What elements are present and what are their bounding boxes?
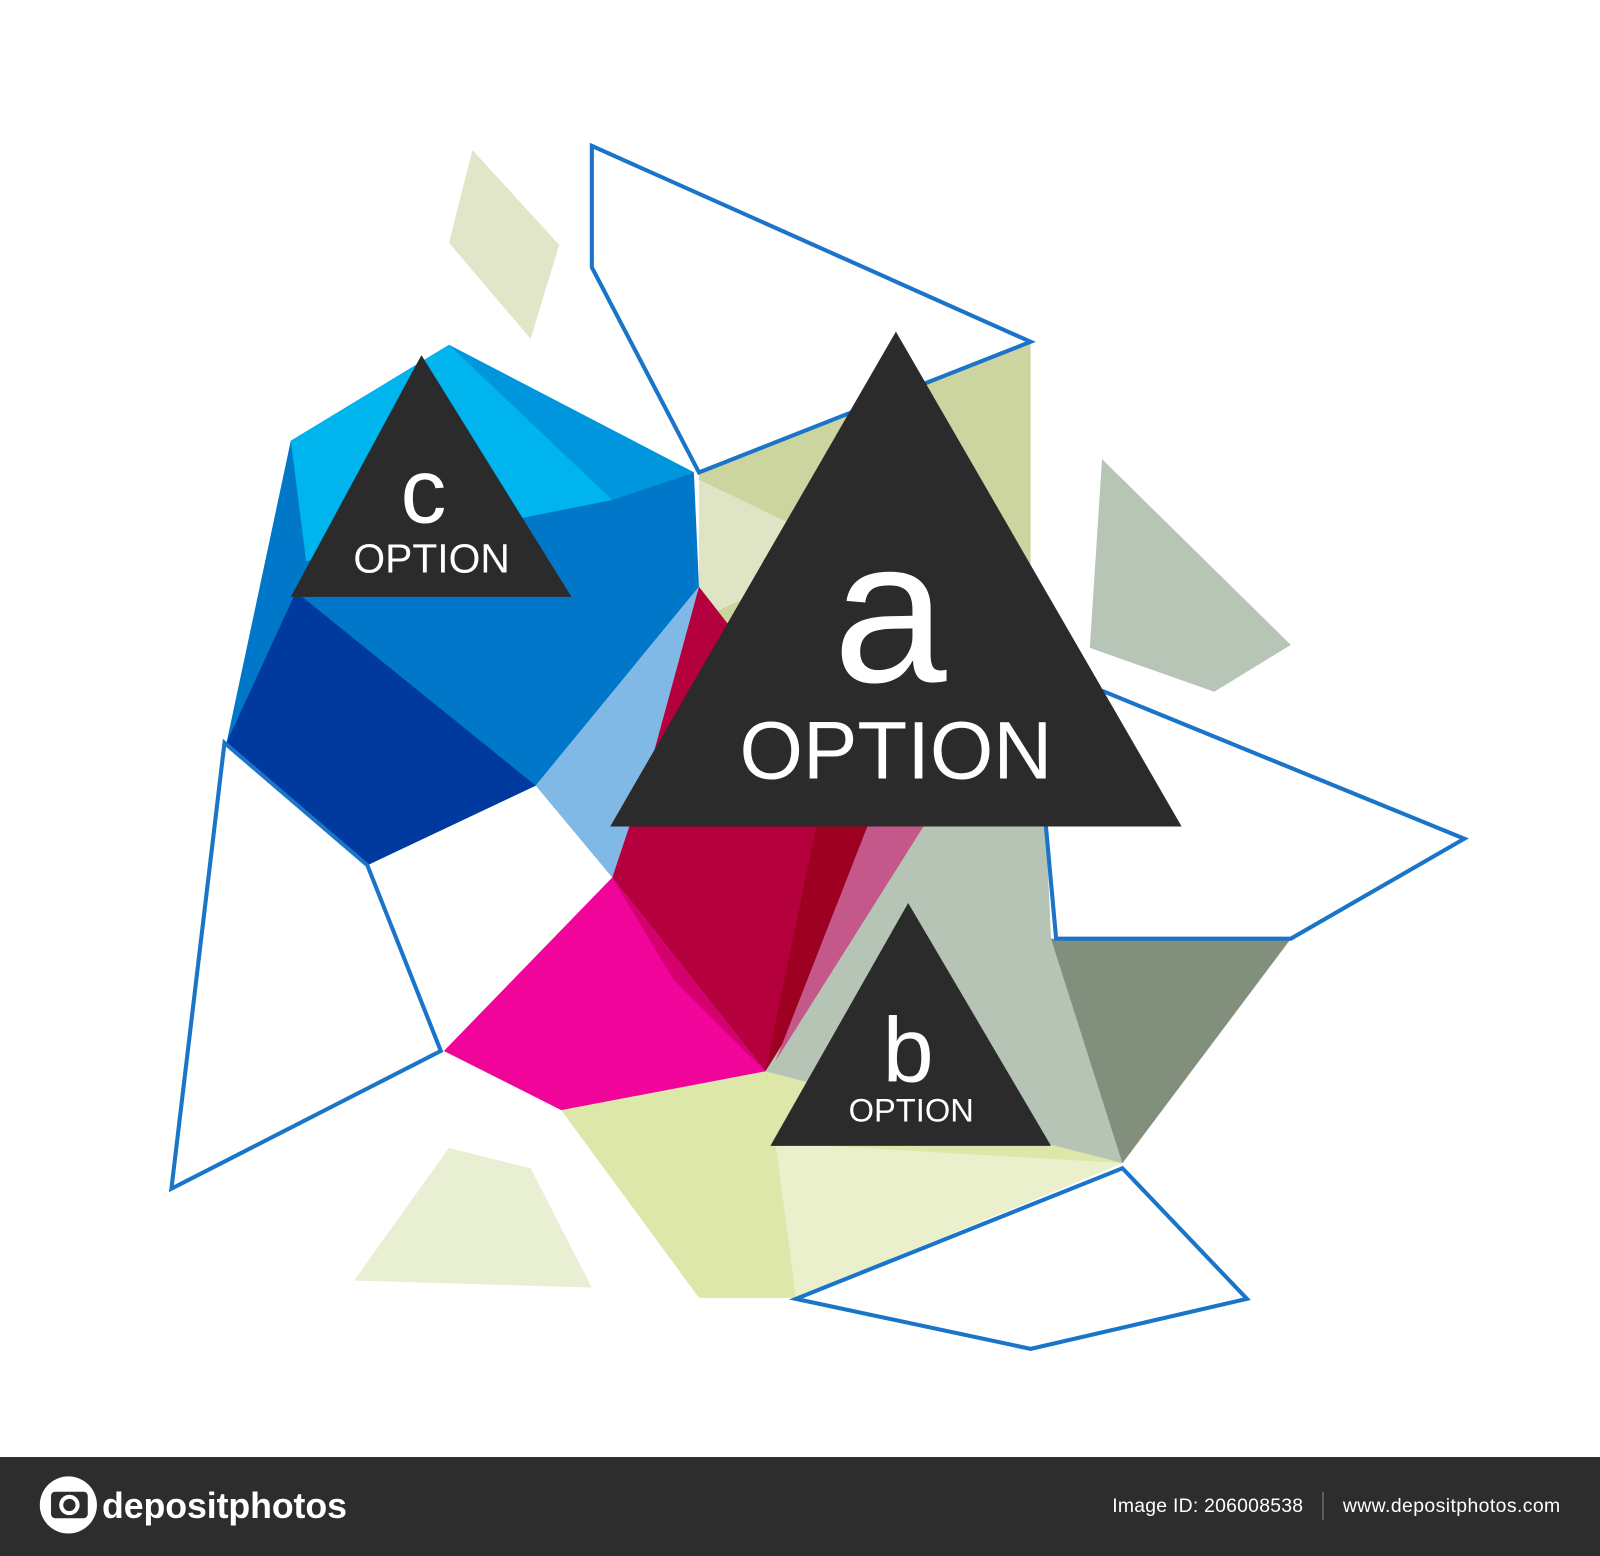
shape: blue hexagon [227,345,699,865]
triangle: option c: OPTION [353,535,510,581]
triangle: option b: b [883,1000,934,1102]
shape: gray-green right [765,826,1291,1163]
shape: pale triangle bottom left [354,1148,592,1288]
shape: gray shard right [1090,459,1291,692]
footer bar [0,1457,1600,1556]
shape: light blue triangle [536,587,699,877]
triangle: option b: OPTION [849,1091,974,1128]
shape: khaki panel [699,342,1031,826]
shape: crimson region [612,587,923,1071]
triangle: option a [610,332,1182,826]
icon: camera logo [40,1476,97,1534]
shape: pale green bottom [561,1071,1122,1298]
footer bar: depositphotos [102,1486,347,1526]
triangle: option c [291,355,571,597]
triangle: option b [770,903,1051,1146]
footer bar: Image ID: 206008538 [1112,1495,1303,1517]
footer bar: www.depositphotos.com [1342,1495,1560,1517]
triangle: option c: c [401,440,446,542]
triangle: option a: a [833,498,947,726]
shape: pale green shard top [449,150,559,339]
triangle: option a: OPTION [739,706,1052,797]
outline: right [1046,691,1464,939]
outline: left [171,743,441,1189]
outline: bottom [796,1168,1247,1349]
outline: top [592,146,1031,472]
shape: magenta region [444,877,765,1110]
